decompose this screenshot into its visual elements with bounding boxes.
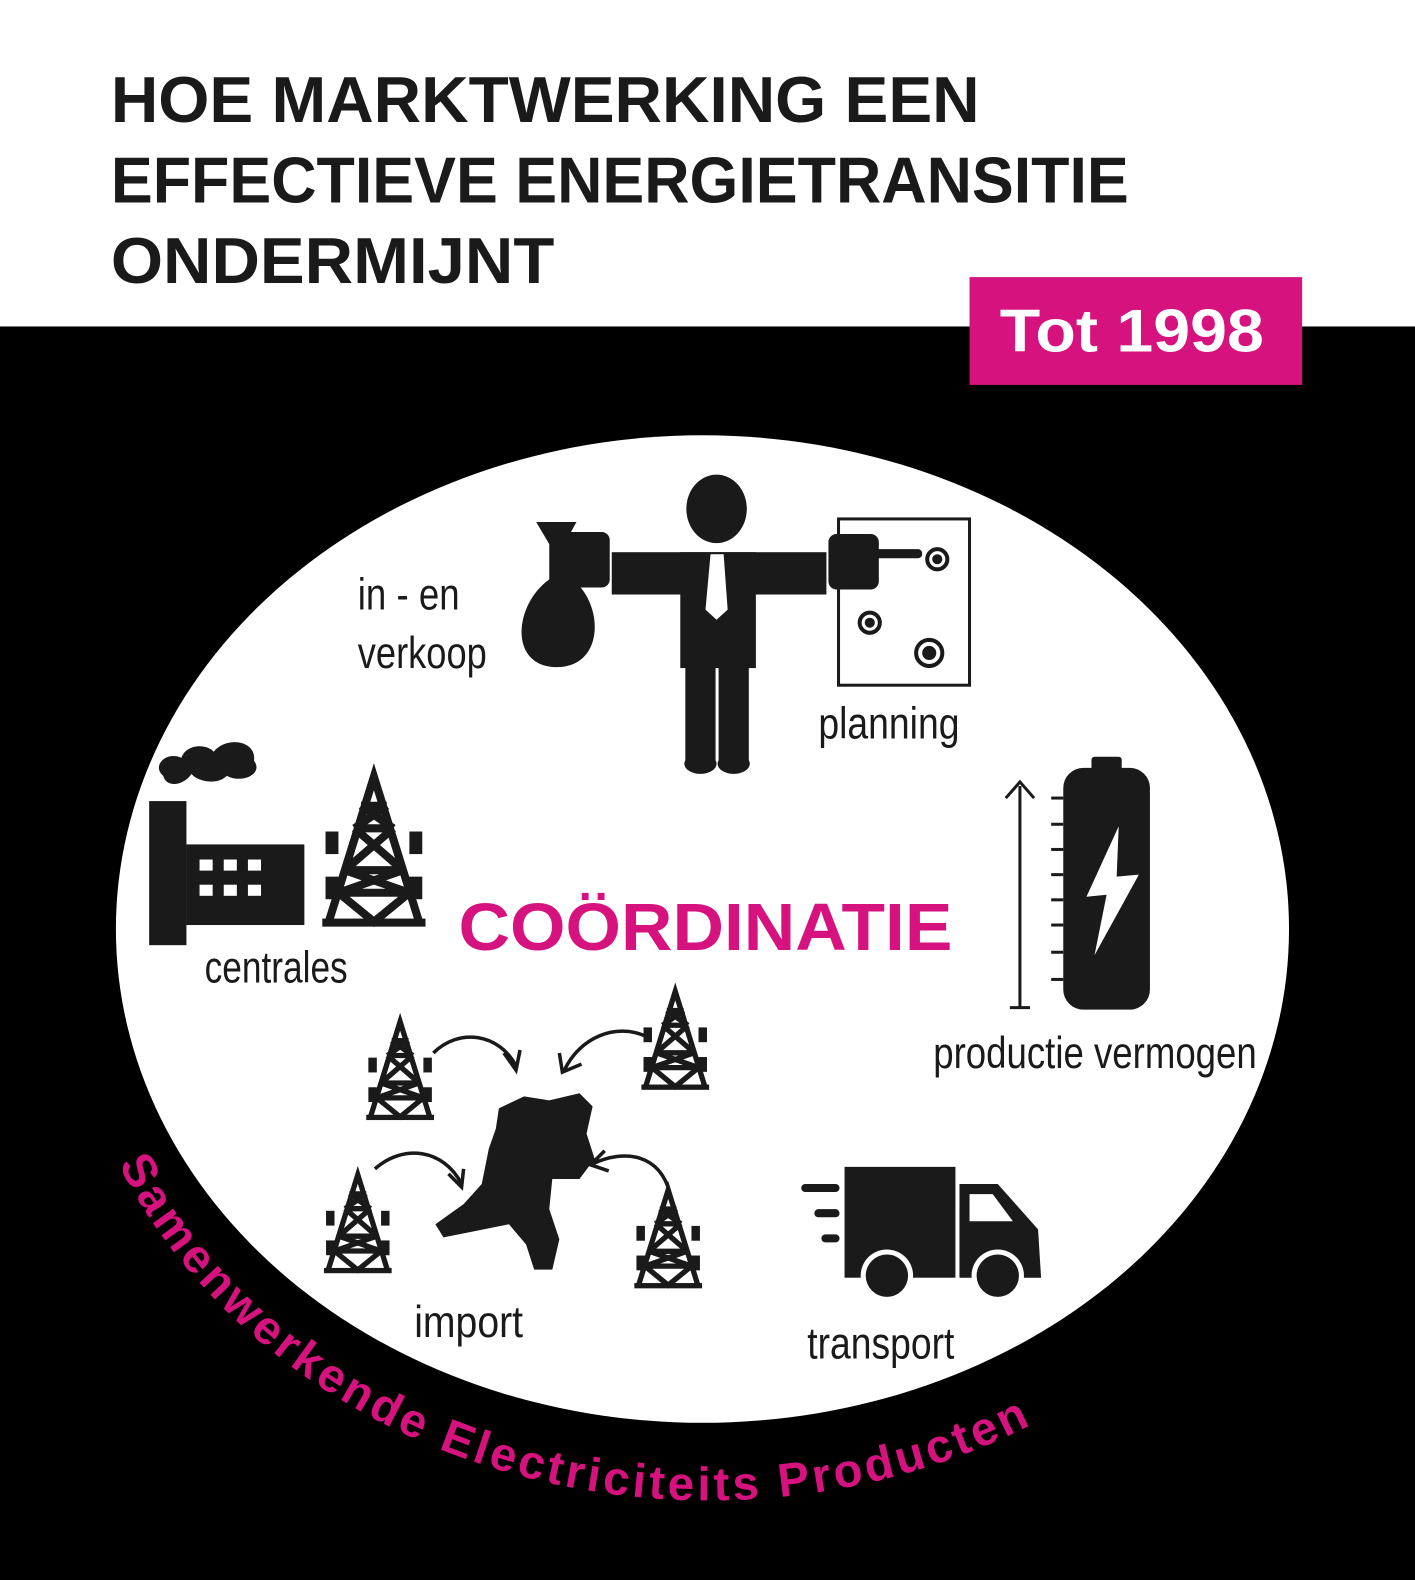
label: in- en verkoop: in - en (358, 571, 460, 620)
icon: truck (801, 1167, 1041, 1302)
icon: planning board (839, 519, 970, 685)
badge: Tot 1998 (970, 277, 1302, 385)
icon: businessman (522, 475, 922, 774)
label: transport: transport (807, 1319, 954, 1368)
label: planning: planning (818, 700, 959, 749)
background black panel (0, 326, 1415, 1580)
label: in- en verkoop (358, 571, 487, 678)
title: HOE MARKTWERKING EEN (111, 64, 980, 136)
heading: COÖRDINATIE: COÖRDINATIE (459, 891, 952, 965)
label: in- en verkoop: verkoop (358, 629, 487, 678)
label: centrales: centrales (205, 943, 348, 992)
icon: battery with arrow (1006, 757, 1150, 1010)
icon: factory (149, 742, 304, 945)
icon: money bag (522, 522, 610, 667)
label: productie vermogen: productie vermogen (933, 1029, 1257, 1078)
label: import: import (414, 1298, 523, 1347)
curved caption: Samenwerkende Electriciteits Producten (122, 1154, 1028, 1501)
title: EFFECTIEVE ENERGIETRANSITIE (111, 145, 1129, 217)
icon: big pylon (322, 777, 426, 927)
title (111, 64, 1129, 297)
white ellipse (116, 435, 1289, 1423)
icon: pointing hand (828, 534, 922, 589)
badge: Tot 1998: Tot 1998 (1000, 297, 1264, 365)
icon: import map with pylons (324, 991, 709, 1288)
title: ONDERMIJNT (111, 225, 554, 297)
